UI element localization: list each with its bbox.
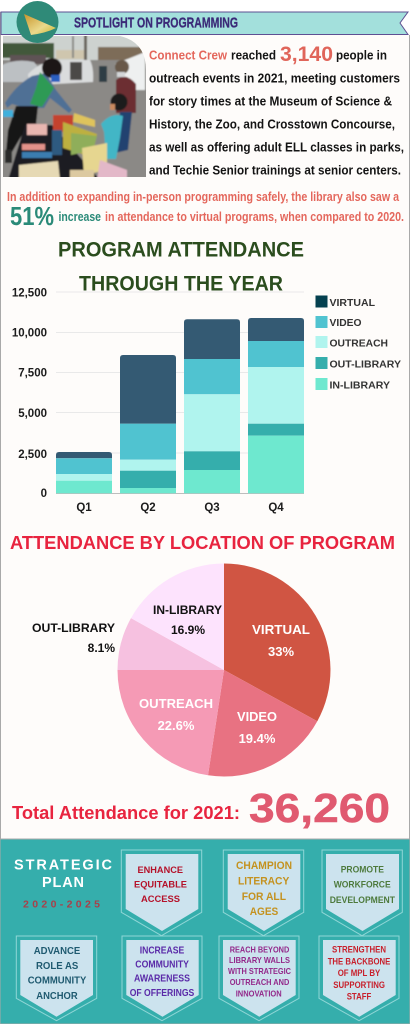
stat: 3,140: 3,140: [280, 43, 333, 66]
y axis labels: 0: [41, 488, 47, 500]
x axis labels: Q4: [268, 502, 284, 514]
text block: virtual increase: [7, 190, 404, 231]
goal: reach beyond library walls: WITH STRATEGIC: [228, 966, 291, 976]
heading: strategic plan: STRATEGIC: [14, 858, 113, 874]
heading: spotlight on programming: SPOTLIGHT ON PROGRAMMING: [74, 16, 238, 32]
total attendance: [12, 785, 390, 831]
goal: advance role as community anchor: ROLE AS: [36, 960, 78, 972]
y axis labels: 2,500: [18, 449, 47, 461]
goal: champion literacy: FOR ALL: [242, 891, 286, 903]
slice: out-library: [118, 618, 224, 670]
x axis labels: Q2: [140, 502, 156, 514]
y axis labels: 10,000: [12, 328, 47, 340]
goal: champion literacy: CHAMPION: [236, 860, 292, 872]
pie chart: [32, 564, 330, 777]
goal: increase community awareness: AWARENESS: [134, 974, 190, 985]
label: in-library: IN-LIBRARY: [153, 603, 222, 617]
y axis labels: 5,000: [18, 408, 47, 420]
goal: enhance equitable access: [121, 850, 202, 936]
slice: outreach: [118, 670, 224, 775]
goal: strengthen the backbone: [319, 936, 399, 1021]
goal: promote workforce development: PROMOTE: [341, 865, 384, 876]
goal: advance role as community anchor: ADVANCE: [34, 945, 80, 957]
text block: virtual increase: increase: [58, 210, 101, 224]
chart legend: VIRTUAL: [330, 297, 376, 309]
goal: strengthen the backbone: THE BACKBONE: [328, 956, 390, 966]
man: [116, 77, 136, 113]
goal: reach beyond library walls: OUTREACH AND: [230, 977, 289, 987]
table and books: [8, 125, 100, 180]
goal: enhance equitable access: ACCESS: [141, 894, 180, 905]
chart legend: OUTREACH: [330, 338, 388, 350]
text block: connect crew: for story times at the Museum of Science &: [149, 94, 392, 108]
label: video: [237, 709, 277, 746]
heading: program attendance: PROGRAM ATTENDANCE: [58, 238, 304, 262]
label: virtual: [252, 622, 310, 659]
goal: strengthen the backbone: SUPPORTING: [333, 980, 385, 990]
goal: promote workforce development: DEVELOPMENT: [330, 895, 395, 906]
label: video: VIDEO: [237, 709, 277, 724]
icon: megaphone badge: [16, 1, 58, 43]
heading: strategic plan: [14, 858, 113, 911]
slice: in-library: [131, 564, 224, 670]
goal: increase community awareness: [122, 936, 202, 1021]
goal: strengthen the backbone: STAFF: [347, 992, 372, 1002]
goal: enhance equitable access: ENHANCE: [138, 865, 183, 876]
goal: enhance equitable access: EQUITABLE: [134, 880, 187, 891]
chart legend: IN-LIBRARY: [330, 380, 390, 392]
label: out-library: OUT-LIBRARY: [32, 621, 115, 635]
bar: Q4: [248, 318, 304, 493]
text block: connect crew: outreach events in 2021, meeting customers: [149, 72, 400, 86]
goal: advance role as community anchor: ANCHOR: [36, 990, 78, 1002]
bar: Q3: [184, 319, 240, 493]
label: outreach: 22.6%: [158, 718, 195, 733]
goal: champion literacy: [223, 850, 304, 936]
y axis labels: 12,500: [12, 288, 47, 300]
label: virtual: VIRTUAL: [252, 622, 310, 637]
goal: advance role as community anchor: [16, 936, 97, 1021]
text block: connect crew: reached: [231, 48, 276, 62]
header ribbon: [1, 1, 408, 43]
goal: increase community awareness: COMMUNITY: [135, 959, 189, 970]
heading: attendance by location: ATTENDANCE BY LOCATION OF PROGRAM: [10, 533, 395, 553]
heading: program attendance: THROUGH THE YEAR: [79, 272, 283, 296]
label: out-library: 8.1%: [88, 641, 115, 655]
stat: 51%: 51%: [10, 201, 54, 231]
goal: reach beyond library walls: INNOVATION: [236, 988, 282, 998]
y axis labels: 7,500: [18, 368, 47, 380]
text block: connect crew: Connect Crew: [149, 48, 227, 62]
goal: champion literacy: LITERACY: [238, 875, 290, 887]
total attendance: Total Attendance for 2021:: [12, 802, 240, 823]
goal: increase community awareness: OF OFFERINGS: [130, 988, 195, 999]
stat: 36,260: 36,260: [249, 785, 390, 831]
label: video: 19.4%: [239, 731, 276, 746]
goal: reach beyond library walls: REACH BEYOND: [230, 944, 289, 954]
child: [101, 115, 123, 159]
y axis labels: [12, 288, 47, 500]
label: outreach: [139, 696, 213, 733]
label: outreach: OUTREACH: [139, 696, 213, 711]
chart legend: [316, 296, 401, 392]
ribbon band: [1, 12, 408, 34]
heading: strategic plan: PLAN: [42, 875, 84, 891]
stacked bar chart: [12, 288, 304, 514]
goal: reach beyond library walls: [219, 936, 299, 1021]
chart legend: OUT-LIBRARY: [330, 358, 401, 370]
goal: strengthen the backbone: STRENGTHEN: [332, 945, 386, 955]
x axis labels: [76, 502, 284, 514]
goal: promote workforce development: WORKFORCE: [334, 880, 391, 891]
goal: strengthen the backbone: OF MPL BY: [338, 968, 380, 978]
label: in-library: 16.9%: [171, 623, 205, 637]
label: out-library: [32, 621, 115, 655]
x axis labels: Q3: [204, 502, 220, 514]
text block: connect crew: History, the Zoo, and Crosstown Concourse,: [149, 118, 395, 132]
panel: strategic plan: [0, 839, 410, 1024]
text block: connect crew: [149, 43, 404, 178]
text block: connect crew: people in: [336, 48, 387, 62]
goal: reach beyond library walls: LIBRARY WALLS: [229, 955, 290, 965]
goal: advance role as community anchor: COMMUNITY: [28, 975, 86, 987]
bar: Q2: [120, 355, 176, 493]
photo: outreach event: [0, 33, 150, 180]
slice: video: [208, 670, 317, 777]
woman: [5, 73, 72, 113]
heading: strategic plan: 2020-2025: [23, 899, 100, 911]
label: virtual: 33%: [268, 644, 294, 659]
goal: promote workforce development: [322, 850, 402, 936]
bar: Q1: [56, 452, 112, 493]
goal: champion literacy: AGES: [250, 906, 278, 918]
heading: program attendance: [58, 238, 304, 296]
slice: virtual: [224, 564, 330, 721]
goal: increase community awareness: INCREASE: [140, 946, 185, 957]
chart legend: VIDEO: [330, 317, 362, 329]
x axis labels: Q1: [76, 502, 92, 514]
label: in-library: [153, 603, 222, 637]
